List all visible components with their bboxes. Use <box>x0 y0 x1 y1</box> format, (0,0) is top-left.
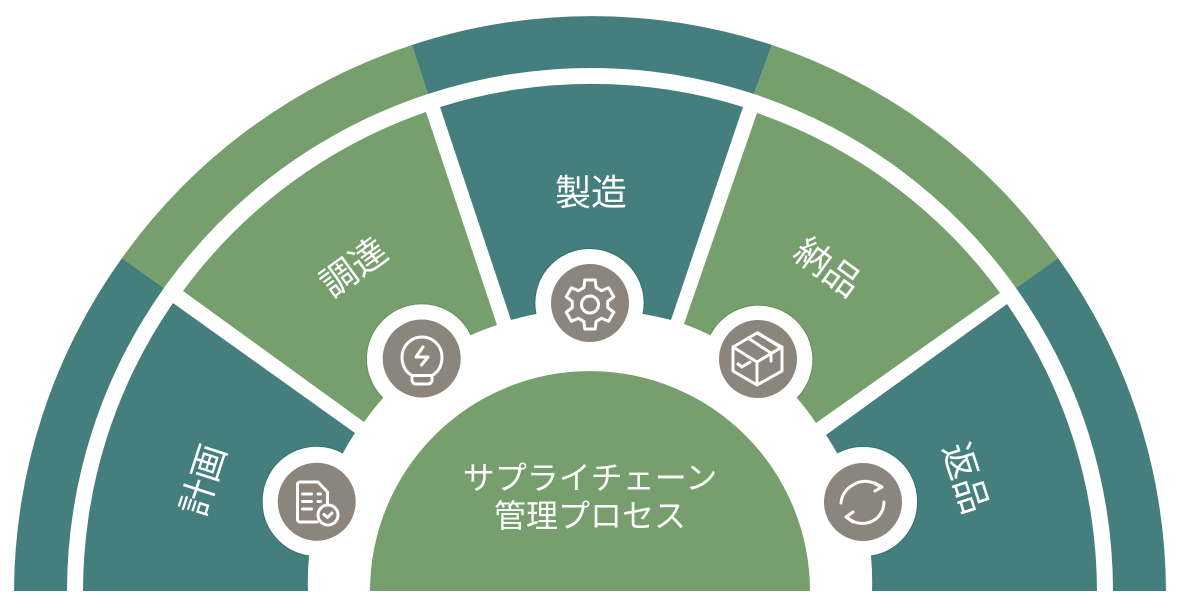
outer ring segment: plan <box>14 258 164 591</box>
manufacturing notch edge <box>535 248 644 314</box>
outer ring segment: return <box>1016 258 1166 591</box>
procurement label: 調達 <box>313 230 395 305</box>
plan notch edge <box>262 446 343 556</box>
plan label: 計画 <box>173 440 234 521</box>
delivery wedge <box>684 113 1000 423</box>
manufacturing label: 製造 <box>555 172 627 213</box>
outer ring segment: delivery <box>754 45 1058 288</box>
panel: plan <box>83 303 356 591</box>
icon: light bulb <box>383 320 461 398</box>
procurement wedge <box>183 112 497 422</box>
delivery label: 納品 <box>787 230 869 305</box>
return wedge <box>826 304 1097 591</box>
center shape <box>370 371 810 591</box>
return label: 返品 <box>935 438 996 519</box>
center title: サプライチェーン <box>463 460 717 496</box>
panel: procurement <box>183 112 497 422</box>
plan wedge <box>83 303 355 591</box>
delivery notch edge <box>710 305 813 398</box>
icon: document with check <box>278 463 356 541</box>
return notch edge <box>837 446 918 556</box>
outer ring segment: procurement <box>122 45 428 288</box>
panel: return <box>824 304 1097 591</box>
center semicircle <box>370 371 810 591</box>
outer ring segment: manufacturing <box>412 16 772 94</box>
procurement notch edge <box>366 304 471 398</box>
panel: manufacturing <box>440 84 743 342</box>
center title: 管理プロセス <box>494 498 686 534</box>
icon: gear <box>551 264 629 342</box>
icon: refresh arrows <box>824 463 902 541</box>
panel: delivery <box>684 113 1000 423</box>
manufacturing wedge <box>440 84 743 320</box>
icon: cardboard box <box>719 320 797 398</box>
